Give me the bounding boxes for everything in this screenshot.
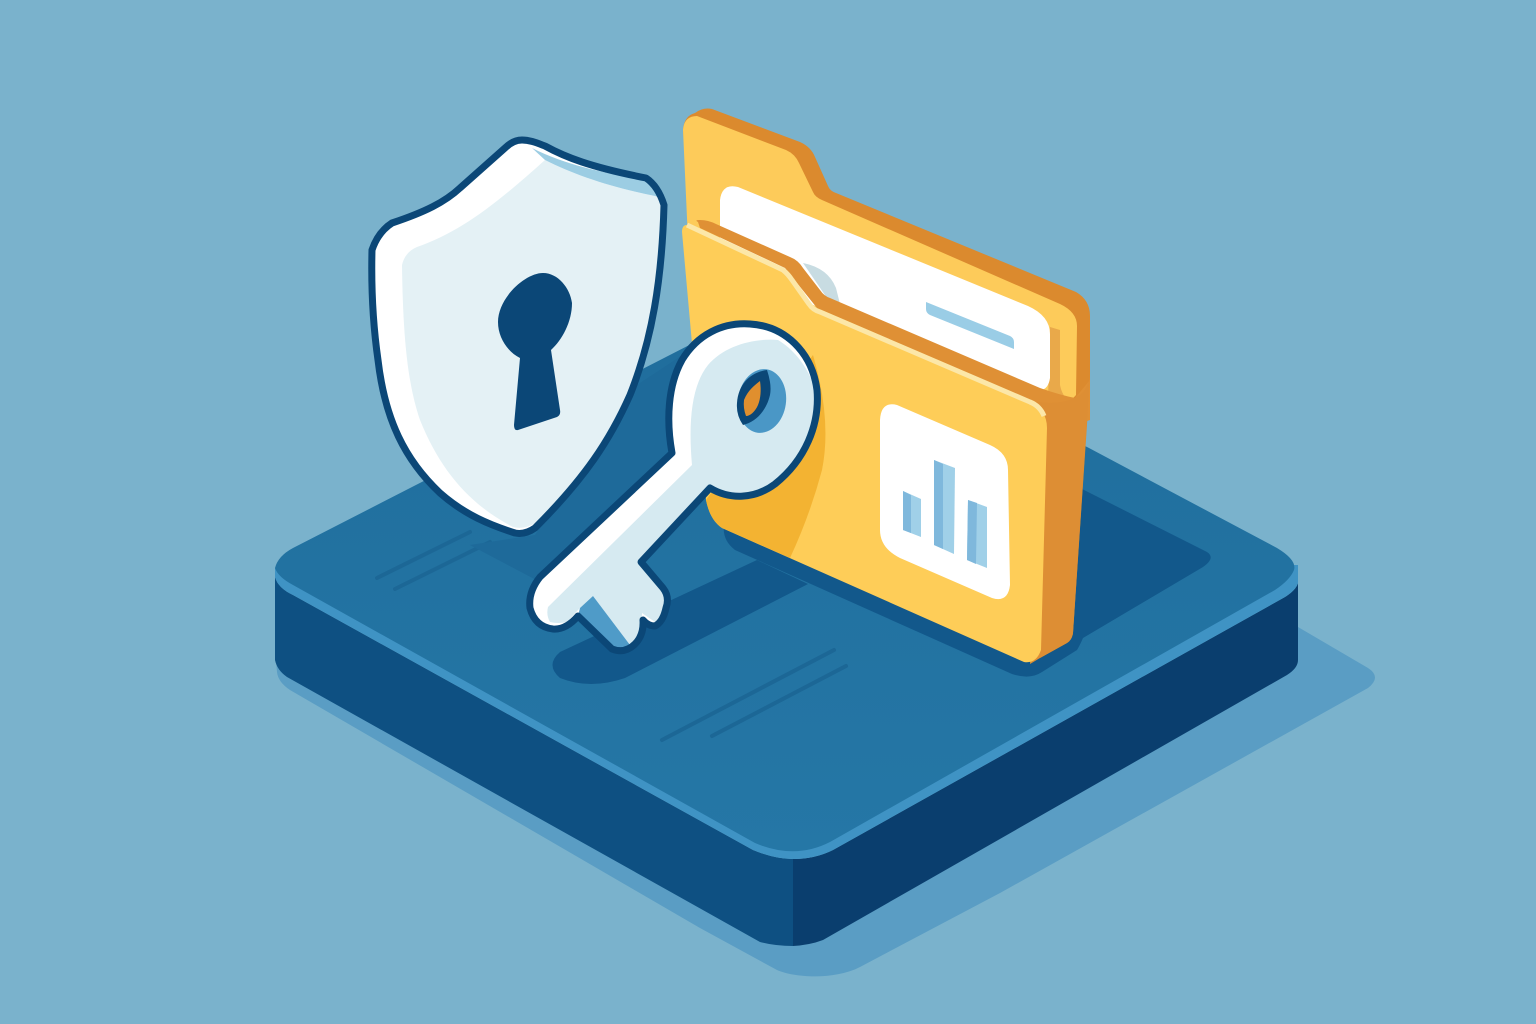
chart card: [880, 404, 1010, 599]
folder back orange edge: [683, 108, 1090, 658]
document crease shadow: [803, 263, 840, 304]
folder back yellow panel: [683, 116, 1077, 401]
key hole: [734, 366, 790, 436]
hole dark rim: [737, 370, 771, 425]
hole orange folder view: [744, 381, 761, 416]
bar two: [934, 460, 955, 554]
folder right side shade: [1048, 327, 1070, 402]
bar three: [967, 500, 987, 568]
folder: [682, 108, 1090, 664]
document label bar: [926, 302, 1014, 349]
document sheet: [720, 186, 1050, 390]
key: [530, 324, 817, 651]
folder pocket orange rim: [696, 220, 1090, 430]
key white body: [530, 324, 817, 651]
shield top edge shade: [532, 148, 660, 198]
shield soft shadow: [470, 350, 690, 582]
card background: [880, 404, 1010, 599]
folder front face: [682, 225, 1047, 662]
key outline: [530, 324, 817, 651]
hole blue inner wall: [734, 366, 790, 436]
platform right side: [793, 583, 1298, 946]
folder recess and contact shadow: [724, 488, 1211, 677]
platform cast shadow: [276, 627, 1375, 976]
surface scratch marks: [377, 532, 846, 740]
platform rim highlight: [275, 565, 1298, 859]
platform: [275, 296, 1298, 946]
platform left side: [275, 577, 793, 946]
shield body: [372, 140, 664, 533]
key cast shadow: [552, 560, 808, 684]
folder front darker fold: [706, 355, 825, 558]
platform top face: [275, 296, 1294, 851]
shield: [372, 140, 664, 533]
keyhole: [498, 273, 572, 430]
folder right orange side: [1030, 375, 1090, 664]
bar chart: [903, 460, 987, 568]
key tooth blue side: [578, 596, 630, 650]
shield outline: [372, 140, 664, 533]
shield inner panel: [402, 160, 662, 528]
key light blue face: [547, 340, 815, 645]
bar one: [903, 491, 921, 537]
folder front pale highlight: [687, 225, 1044, 416]
